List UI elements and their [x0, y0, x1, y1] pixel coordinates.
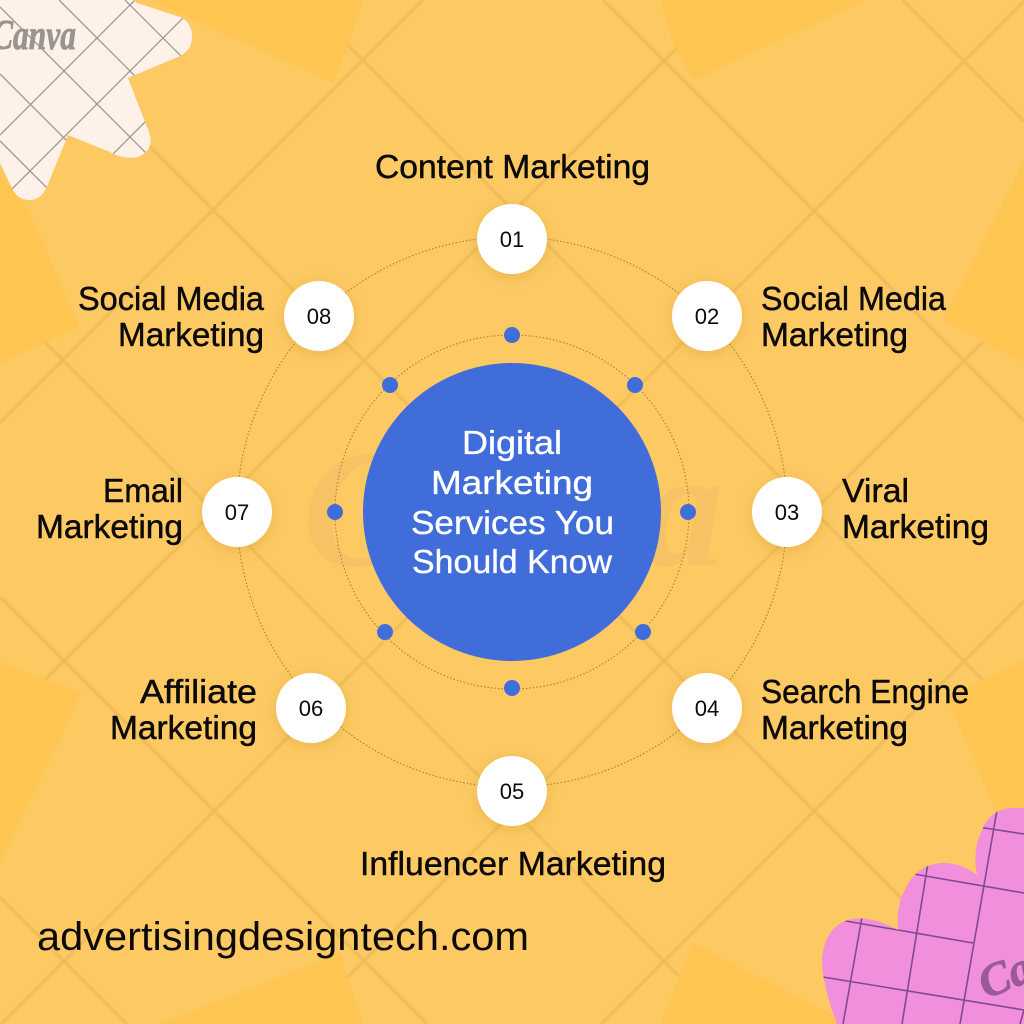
label 06: Marketing	[110, 709, 257, 746]
item 02	[672, 280, 947, 353]
label 08	[78, 280, 265, 353]
label 02	[761, 280, 947, 353]
label 01: Content Marketing	[375, 148, 650, 185]
center title: Services You	[411, 504, 614, 541]
item 05	[360, 756, 666, 882]
label 06	[110, 673, 257, 746]
background watermark: Canva	[303, 416, 723, 602]
label 03: Marketing	[842, 508, 989, 545]
label 04: Marketing	[761, 709, 908, 746]
website url: advertisingdesigntech.com	[37, 915, 529, 959]
label 02: Social Media	[761, 280, 947, 317]
label 04	[761, 673, 969, 746]
item 06	[110, 673, 346, 746]
item 07: 07	[225, 500, 249, 525]
label 04: Search Engine	[761, 673, 969, 710]
item 06: 06	[299, 696, 323, 721]
label 03	[842, 472, 989, 545]
label 03: Viral	[842, 472, 909, 509]
label 08: Marketing	[118, 316, 264, 353]
center circle	[363, 363, 661, 661]
item 03: 03	[775, 500, 799, 525]
item 07	[36, 472, 272, 547]
item 02: 02	[695, 304, 719, 329]
label 02: Marketing	[761, 316, 908, 353]
item 08: 08	[307, 304, 331, 329]
sticker: cream blob	[0, 0, 192, 200]
item 08	[78, 280, 354, 353]
label 07	[36, 472, 183, 545]
outer dotted ring	[237, 237, 787, 787]
item 01	[375, 148, 650, 274]
item 03	[752, 472, 989, 547]
label 07: Email	[103, 472, 183, 509]
center title: Marketing	[431, 464, 593, 501]
label 06: Affiliate	[140, 673, 257, 710]
sticker: pink blob	[815, 800, 1024, 1024]
item 01: 01	[500, 227, 524, 252]
item 04	[672, 673, 969, 746]
item 04: 04	[695, 696, 719, 721]
inner dotted ring	[335, 335, 689, 689]
center title: Digital	[462, 424, 562, 461]
blue ring dots	[327, 327, 696, 696]
center title	[411, 424, 614, 580]
item 05: 05	[500, 779, 524, 804]
label 08: Social Media	[78, 280, 265, 317]
label 07: Marketing	[36, 508, 183, 545]
label 05: Influencer Marketing	[360, 845, 666, 882]
center title: Should Know	[412, 543, 612, 580]
